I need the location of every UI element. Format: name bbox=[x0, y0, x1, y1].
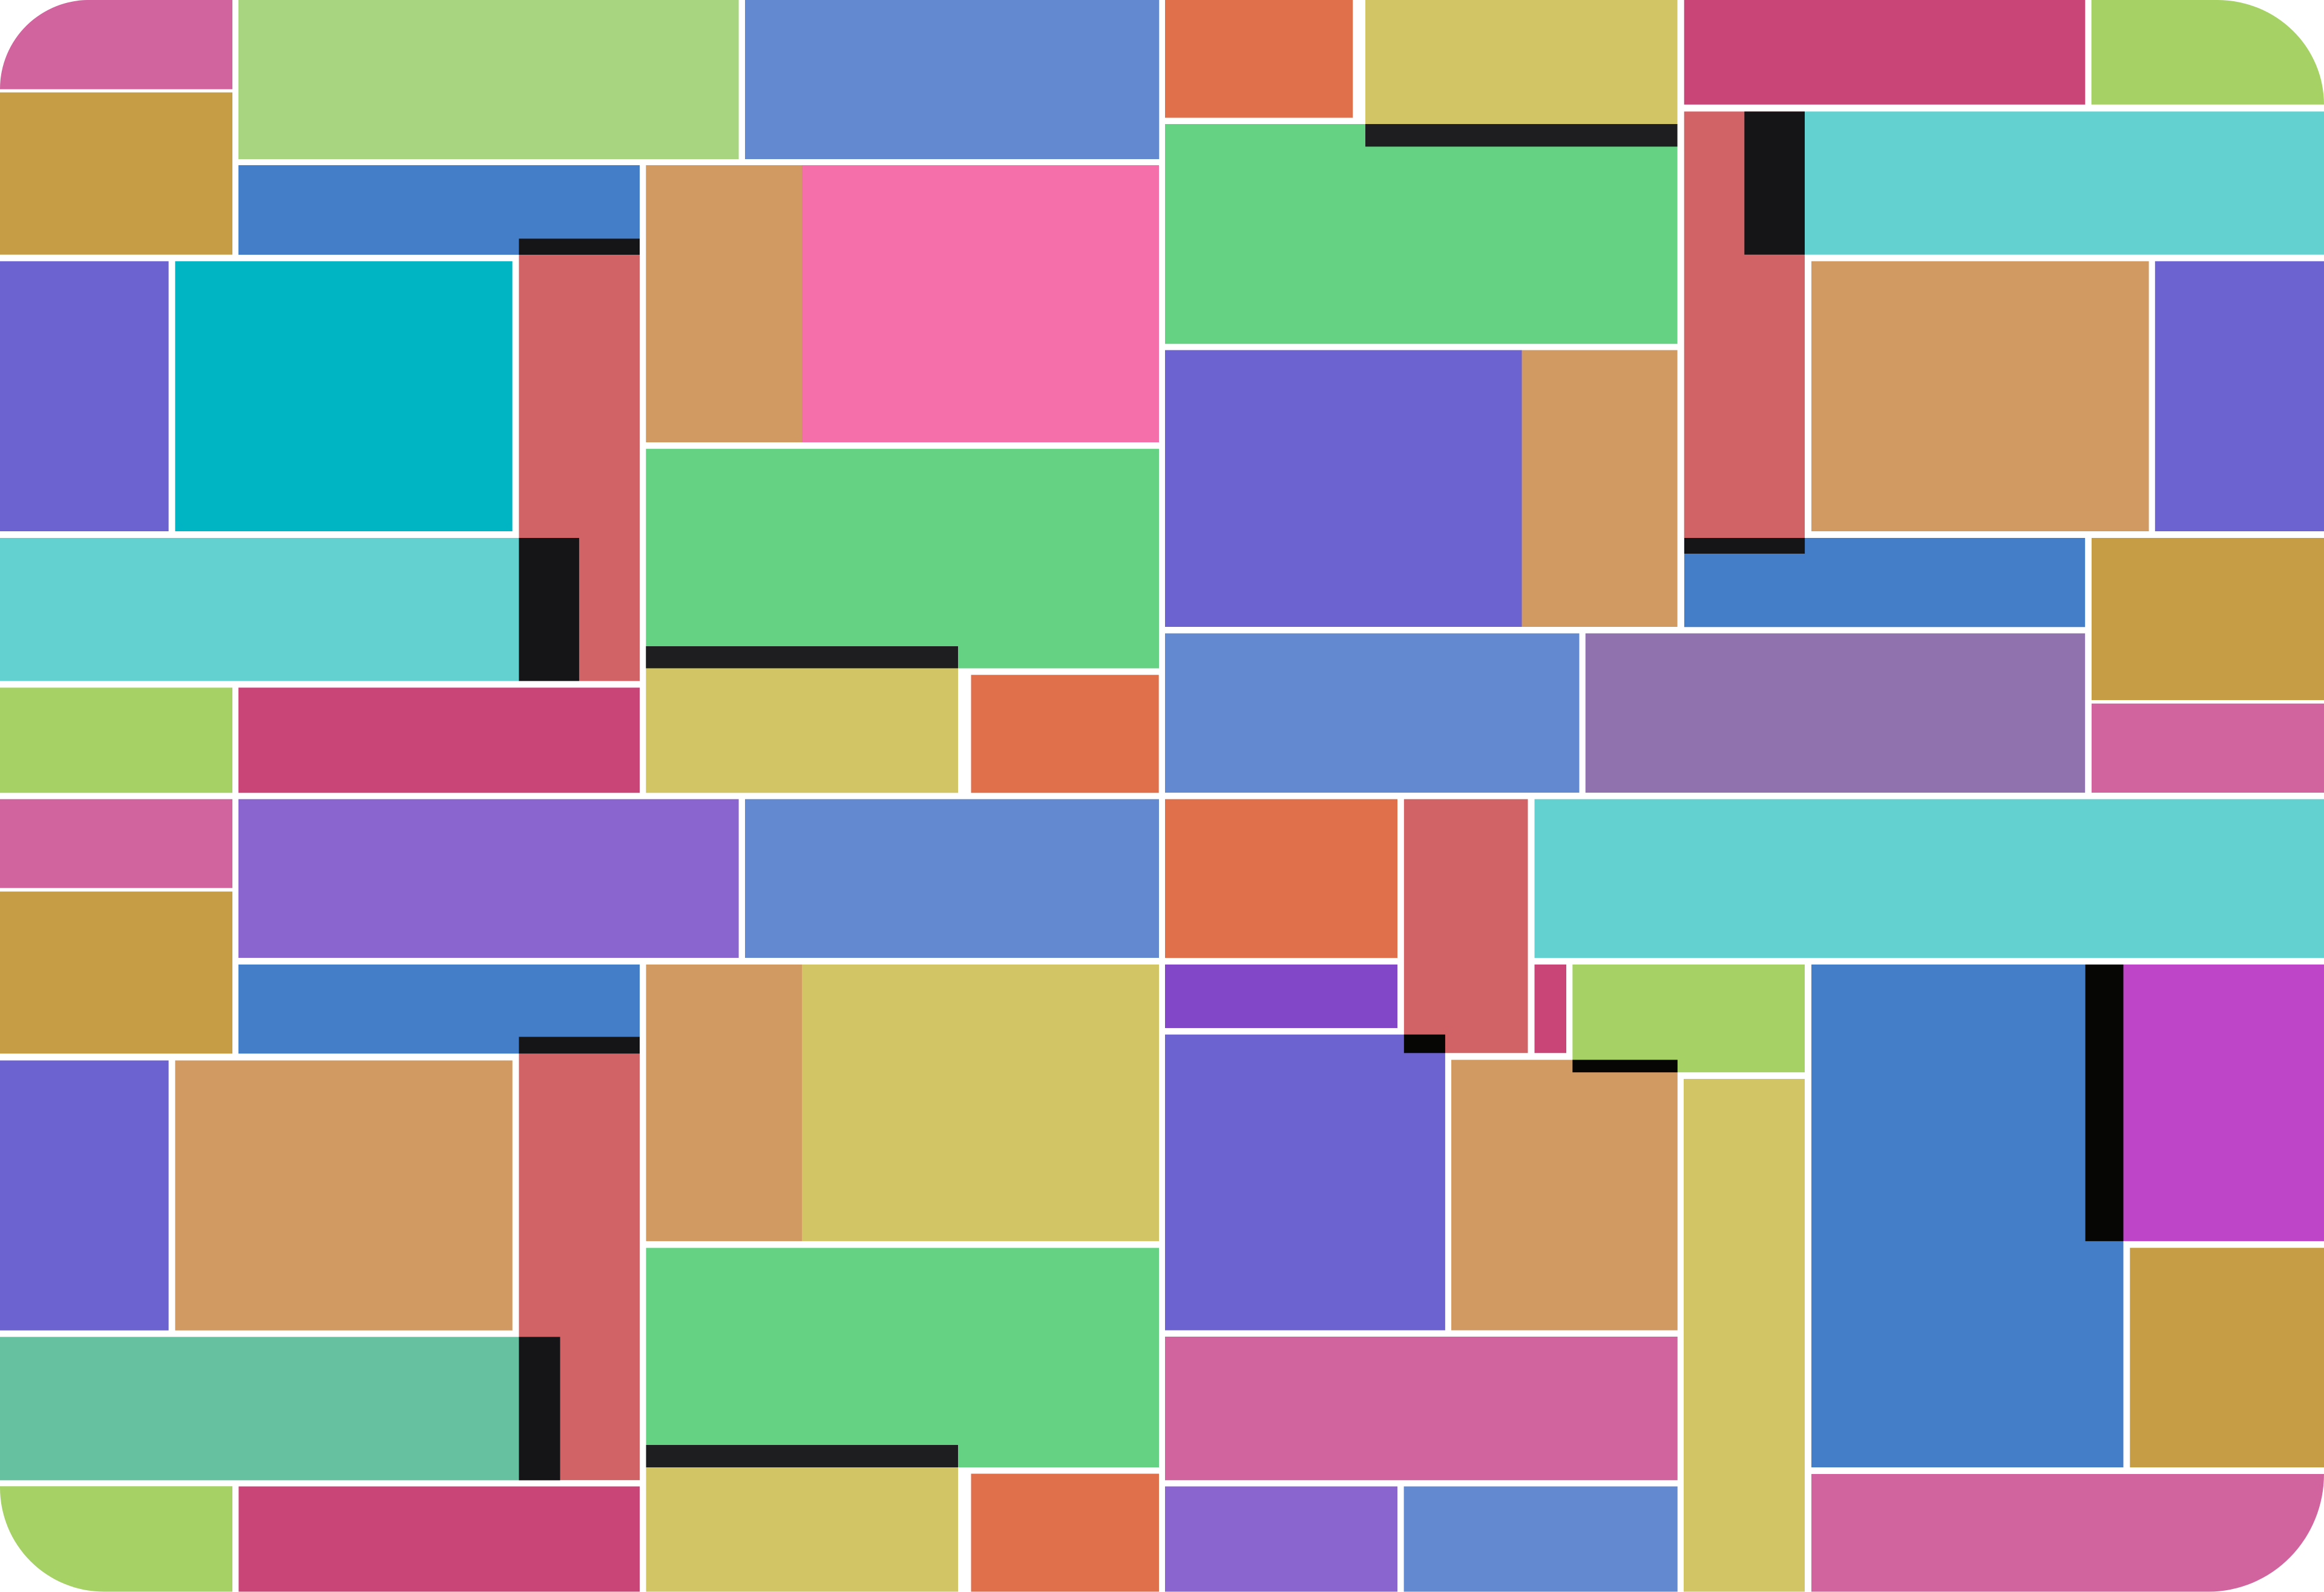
tile: gold bbox=[0, 93, 232, 255]
tile: tan centre bbox=[1521, 350, 1678, 627]
tile: blue large bbox=[1811, 965, 2123, 1467]
tile: cyan left bbox=[0, 538, 519, 681]
overlap: dark bar on blue right bbox=[1684, 538, 1805, 554]
tile: soft blue bbox=[745, 0, 1159, 159]
tile: green centre bbox=[646, 449, 1159, 668]
tile: green bbox=[1165, 124, 1678, 344]
tile: yellow bbox=[1365, 0, 1678, 124]
overlap: dark bar on green lower bbox=[646, 1445, 958, 1467]
tile: tan bbox=[646, 165, 802, 442]
tile: orange centre bbox=[971, 675, 1159, 793]
tile: indigo centre bbox=[1165, 350, 1522, 627]
tile: sea green bbox=[0, 1337, 519, 1480]
tile: light green bbox=[238, 0, 739, 159]
tile: tan left lower bbox=[175, 1060, 513, 1331]
tile: pink top-left rounded corner bbox=[0, 0, 232, 90]
tile: mauve bbox=[1586, 634, 2085, 793]
tile: tan centre lower bbox=[1451, 1060, 1678, 1330]
tile: soft blue upper bbox=[745, 799, 1159, 958]
tile: indigo centre lower bbox=[1165, 1035, 1445, 1330]
overlap: dark bar on green centre bbox=[646, 646, 958, 668]
tile: cyan bbox=[1805, 111, 2324, 255]
panel: top half tiles bbox=[0, 0, 2324, 793]
tile: magenta bbox=[2123, 965, 2324, 1241]
tile: blue right bbox=[1684, 538, 2085, 627]
tile: crimson left bbox=[238, 687, 640, 793]
panel: bottom half tiles bbox=[0, 799, 2324, 1591]
overlap: dark bar on green top bbox=[1365, 124, 1678, 146]
tile: orange bottom bbox=[971, 1474, 1159, 1591]
tile: blue bbox=[238, 165, 640, 255]
tile: indigo right bbox=[2155, 261, 2324, 531]
tile: soft blue centre bbox=[1165, 634, 1580, 793]
tile: pink right bbox=[2092, 704, 2324, 793]
tile: indigo left bbox=[0, 261, 169, 531]
overlap: black bar on indigo bbox=[1404, 1035, 1445, 1053]
tile: red tall right bbox=[1684, 111, 1805, 538]
tile: crimson bottom bbox=[238, 1486, 640, 1591]
tile: pink centre lower bbox=[1165, 1337, 1678, 1480]
tile: purple bbox=[238, 799, 739, 958]
overlap: dark bar on red left bbox=[519, 538, 579, 681]
overlap: dark bar on blue bbox=[519, 238, 640, 255]
tile: soft blue bottom bbox=[1404, 1486, 1678, 1591]
tile: pink bottom-right rounded corner bbox=[1811, 1474, 2324, 1591]
tile: cyan wide bbox=[1535, 799, 2324, 958]
tile: orange bbox=[1165, 0, 1353, 118]
tile: lime top-right rounded corner bbox=[2092, 0, 2324, 105]
tile: tan lower bbox=[646, 965, 802, 1241]
overlap: dark bar on blue lower bbox=[519, 1037, 640, 1053]
tile: blue lower bbox=[238, 965, 640, 1053]
tile: teal bbox=[175, 261, 513, 531]
tile: violet bbox=[1165, 965, 1397, 1028]
tile: pink left bbox=[0, 799, 232, 888]
tile: red tall left bbox=[519, 255, 640, 681]
overlap: dark bar on sea green bbox=[519, 1337, 560, 1480]
tile: lime bottom-left rounded corner bbox=[0, 1486, 232, 1591]
tile: purple bottom bbox=[1165, 1486, 1397, 1591]
overlap: black bar on blue large bbox=[2086, 965, 2123, 1241]
tile: yellow tall bbox=[1684, 1079, 1805, 1591]
tile: green lower bbox=[646, 1248, 1159, 1467]
tile: red middle bbox=[1404, 799, 1528, 1053]
tile: lime left bbox=[0, 687, 232, 793]
tile: hot pink bbox=[802, 165, 1159, 442]
tile: crimson small bbox=[1535, 965, 1566, 1053]
tile: gold left bbox=[0, 891, 232, 1053]
tile: red tall lower bbox=[519, 1053, 640, 1480]
tile: yellow bottom bbox=[646, 1467, 958, 1591]
tile: orange upper bbox=[1165, 799, 1397, 958]
overlap: dark bar on red right bbox=[1744, 111, 1805, 255]
tile: indigo left lower bbox=[0, 1060, 169, 1331]
tile: tan right bbox=[1811, 261, 2149, 531]
tile: crimson bbox=[1684, 0, 2085, 105]
tile: yellow centre bbox=[646, 668, 958, 793]
overlap: black bar on lime bbox=[1572, 1060, 1678, 1072]
tile: lime small bbox=[1572, 965, 1805, 1072]
tile: gold right bbox=[2092, 538, 2324, 700]
tile: yellow lower bbox=[802, 965, 1159, 1241]
tile: gold lower right bbox=[2130, 1248, 2324, 1467]
